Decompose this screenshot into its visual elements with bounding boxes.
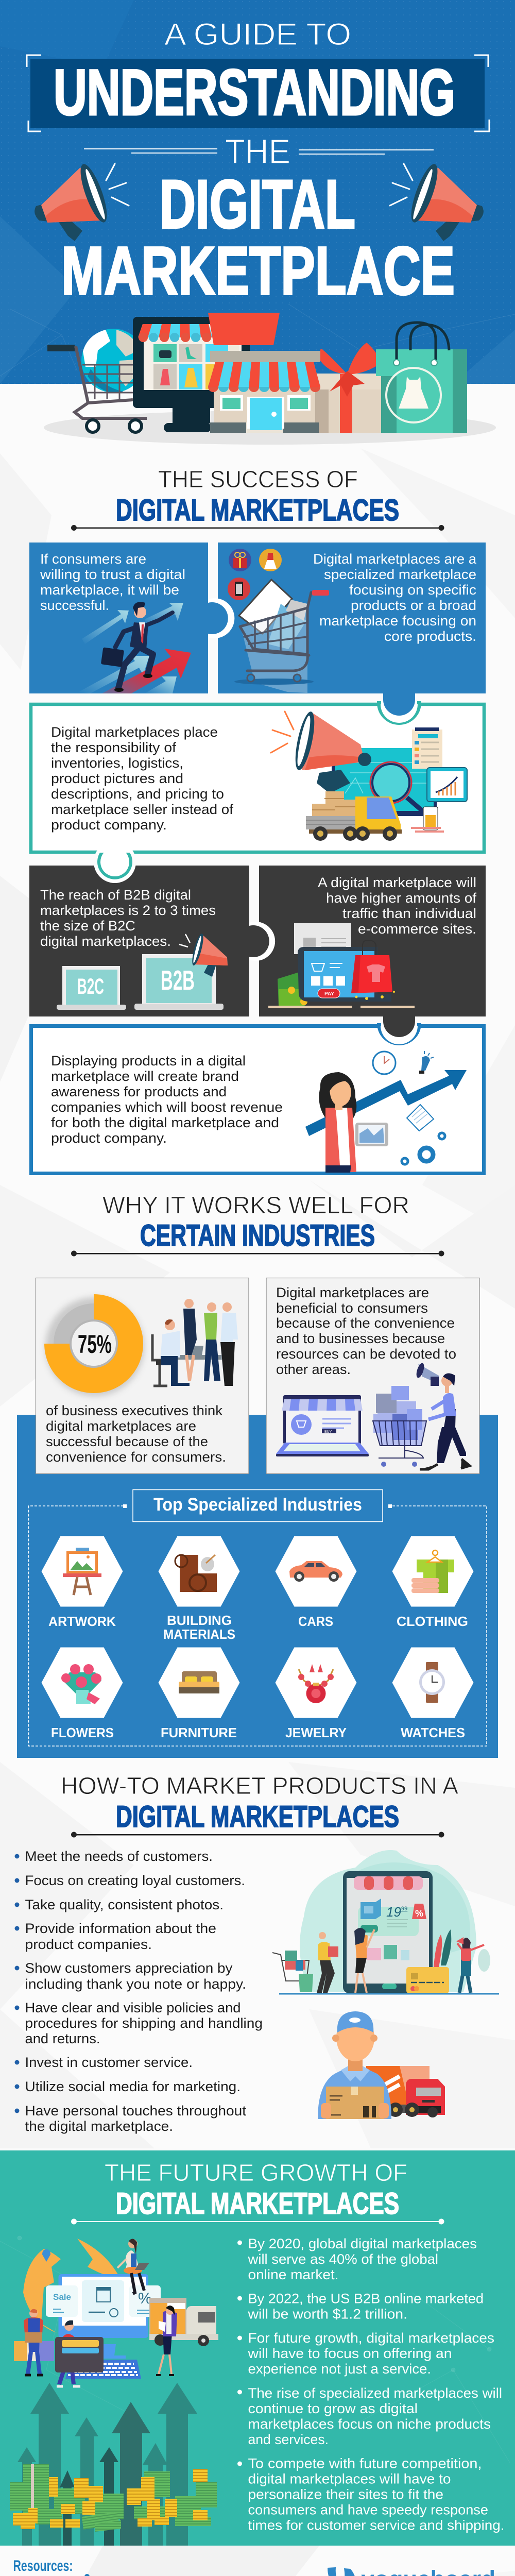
panel text: and to businesses because <box>276 1331 445 1346</box>
rule <box>0 2574 90 2576</box>
icon: B2C laptop: B2C <box>77 974 104 999</box>
panel text: marketplace, it will be <box>40 582 179 598</box>
tile: watches <box>392 1648 474 1740</box>
panel text: the size of B2C <box>40 918 135 934</box>
hero background <box>0 0 515 384</box>
bullet list: future growth: times for customer service and shipping. <box>248 2517 505 2533</box>
shopping cart <box>47 345 147 432</box>
bullet list: future growth: continue to grow as digital <box>248 2401 418 2416</box>
section heading: success <box>71 466 444 531</box>
bullet list: how-to: Provide information about the <box>25 1921 216 1936</box>
heading bold line: DIGITAL MARKETPLACES <box>116 494 399 527</box>
icon: B2B laptop: B2B <box>161 965 195 996</box>
label <box>163 1613 235 1642</box>
label: MATERIALS <box>163 1626 235 1642</box>
title box <box>30 59 485 128</box>
bullet list: future growth: By 2020, global digital marketplaces <box>248 2236 477 2251</box>
section heading: how-to <box>61 1772 458 1837</box>
icon: right megaphone <box>390 161 484 241</box>
icon: online shop laptop: PAY <box>324 991 334 997</box>
panel text: marketplaces is 2 to 3 times <box>40 903 216 918</box>
panel text: If consumers are <box>40 551 146 567</box>
panel text: awareness for products and <box>51 1084 227 1099</box>
icon: delivery man with truck <box>318 2011 445 2119</box>
label: ARTWORK <box>48 1614 116 1629</box>
panel text: marketplace seller instead of <box>51 802 234 817</box>
bullet list: how-to: including thank you note or happy. <box>25 1976 246 1992</box>
panel text: resources can be devoted to <box>276 1346 456 1362</box>
panel text: marketplace will create brand <box>51 1069 239 1084</box>
bullet list: future growth: To compete with future competition, <box>248 2455 482 2471</box>
tile: jewelry <box>275 1648 356 1740</box>
bullet list: how-to: Have personal touches throughout <box>25 2103 247 2119</box>
bullet list: how-to: Have clear and visible policies and <box>25 2000 241 2015</box>
label: WATCHES <box>401 1725 465 1740</box>
heading bold line: CERTAIN INDUSTRIES <box>140 1219 375 1252</box>
icon: left megaphone <box>35 161 129 241</box>
panel text: of business executives think <box>46 1403 223 1418</box>
panel text <box>318 875 477 937</box>
panel text: The reach of B2B digital <box>40 887 191 903</box>
panel text: product company. <box>51 1130 167 1146</box>
icon: megaphone <box>179 933 228 977</box>
icon: gift badge <box>229 549 251 571</box>
label: JEWELRY <box>285 1725 347 1740</box>
bullet list: how-to: Utilize social media for marketing. <box>25 2079 241 2094</box>
shopping bag <box>376 323 467 433</box>
label: FLOWERS <box>51 1725 114 1740</box>
panel text: companies which will boost revenue <box>51 1099 283 1115</box>
panel: specialized <box>208 543 486 693</box>
tile: artwork <box>41 1536 123 1629</box>
illustration: e-commerce team: % <box>138 2290 152 2307</box>
icon: B2C laptop <box>57 966 126 1010</box>
panel text: e-commerce sites. <box>358 921 476 937</box>
label: FURNITURE <box>161 1725 237 1740</box>
icon: woman with growth arrow <box>305 1051 467 1173</box>
tile: building materials <box>159 1536 240 1642</box>
panel text: marketplace focusing on <box>319 613 476 629</box>
icon: B2B laptop <box>134 954 224 1010</box>
panel text <box>40 551 185 613</box>
divider <box>71 1832 444 1837</box>
label: CARS <box>298 1614 333 1629</box>
panel text: other areas. <box>276 1362 351 1377</box>
bullet list: how-to: Focus on creating loyal customers. <box>25 1873 245 1888</box>
icon: online shop laptop <box>268 923 415 1008</box>
heading bold line: DIGITAL MARKETPLACES <box>116 1800 399 1834</box>
title: DIGITAL: DIGITAL <box>160 166 355 243</box>
bullet list: how-to: product companies. <box>25 1937 152 1952</box>
double rules <box>84 149 434 154</box>
panel text: inventories, logistics, <box>51 755 183 771</box>
panel text: successful. <box>40 598 109 613</box>
icon: team at desk <box>152 1299 238 1386</box>
panel text: successful because of the <box>46 1434 208 1449</box>
footer: resources <box>0 2557 300 2576</box>
heading light line: WHY IT WORKS WELL FOR <box>102 1192 409 1218</box>
panel: convenience <box>266 1278 479 1473</box>
title box <box>133 1490 383 1522</box>
panel text: Digital marketplaces are a <box>313 551 477 567</box>
tile: cars <box>275 1536 356 1629</box>
bullet list: future growth: digital marketplaces will have to <box>248 2471 451 2486</box>
panel text <box>51 724 234 833</box>
panel text: Digital marketplaces place <box>51 724 218 740</box>
bullet list: future growth: will have to focus on offering an <box>247 2346 452 2361</box>
monitor <box>133 317 250 432</box>
globe <box>81 329 145 393</box>
panel text: willing to trust a digital <box>40 567 185 582</box>
puzzle knob <box>249 866 275 1016</box>
bullet list: how-to <box>14 1849 263 2134</box>
bullet list: future growth: For future growth, digital marketplaces <box>248 2330 494 2346</box>
title text: Top Specialized Industries <box>153 1495 362 1515</box>
donut chart: 75% <box>78 1330 112 1359</box>
icon: mobile store illustration: % <box>415 1908 423 1919</box>
ground shadow <box>44 411 496 445</box>
icon: woman with cart and megaphone <box>373 1362 470 1469</box>
heading bold line: DIGITAL MARKETPLACES <box>116 2187 399 2221</box>
panel text: product company. <box>51 817 167 833</box>
corner brackets <box>27 55 489 131</box>
tile: furniture <box>159 1648 240 1740</box>
bullet list: future growth: will serve as 40% of the global <box>247 2251 438 2267</box>
panel text: focusing on specific <box>349 582 476 598</box>
bullet list: how-to: Invest in customer service. <box>25 2055 193 2070</box>
illustration: e-commerce team: Sale <box>53 2292 71 2302</box>
panel text: beneficial to consumers <box>276 1300 428 1316</box>
panel text: digital marketplaces. <box>40 934 171 949</box>
panel: future growth <box>0 2150 515 2546</box>
panel text: because of the convenience <box>276 1315 455 1331</box>
bullet list: future growth: marketplaces focus on niche products <box>248 2416 491 2432</box>
panel text: products or a broad <box>351 598 476 613</box>
panel text: Digital marketplaces are <box>276 1285 429 1300</box>
bullet list: how-to: Show customers appreciation by <box>25 1960 233 1976</box>
icon: mobile store illustration: 19 <box>386 1904 401 1920</box>
panel: top specialized industries <box>29 1490 487 1746</box>
donut chart <box>44 1294 144 1396</box>
puzzle knob <box>208 543 234 693</box>
icon: mobile store illustration: 99 <box>401 1906 407 1912</box>
logo mark <box>328 2567 356 2576</box>
bullet list: future growth: consumers and have speedy response <box>248 2502 488 2517</box>
icon: marketing illustration <box>271 710 467 841</box>
panel: B2B reach <box>29 841 249 1016</box>
bullet list: future growth: personalize their sites to fit the <box>248 2486 443 2502</box>
label: CLOTHING <box>397 1614 468 1629</box>
panel text: specialized marketplace <box>324 567 476 582</box>
blue industries section background <box>17 1415 498 1758</box>
bullet list: future growth: The rise of specialized marketplaces will <box>248 2385 502 2401</box>
resources heading: Resources: <box>13 2557 73 2574</box>
heading light line: HOW-TO MARKET PRODUCTS IN A <box>61 1772 458 1799</box>
gift box <box>315 343 386 433</box>
divider <box>71 1251 444 1256</box>
panel text: descriptions, and pricing to <box>51 786 224 802</box>
storefront <box>208 313 320 433</box>
heading light line: THE SUCCESS OF <box>158 466 358 493</box>
logo: vogueboard <box>313 2566 515 2576</box>
panel text <box>51 1053 283 1146</box>
icon: shop laptop: BUY <box>324 1430 332 1434</box>
icon: phone badge <box>228 578 250 600</box>
panel text: core products. <box>384 629 476 644</box>
panel: traffic <box>249 866 486 1016</box>
label: BUILDING <box>167 1613 232 1628</box>
heading light line: THE FUTURE GROWTH OF <box>105 2159 407 2186</box>
bullet list: future growth: experience not just a service. <box>248 2361 431 2377</box>
illustration: money pile <box>10 2464 217 2532</box>
panel: trust <box>29 543 208 693</box>
puzzle knob <box>93 841 139 883</box>
tile: flowers <box>41 1648 123 1740</box>
dashed frame <box>29 1506 487 1746</box>
panel text: traffic than individual <box>342 906 476 921</box>
chart: rising arrows <box>18 2383 197 2546</box>
bullet list: future growth <box>237 2236 505 2533</box>
panel text: digital marketplaces are <box>46 1418 196 1434</box>
icon: dress badge <box>259 549 282 571</box>
bullet list: how-to: Meet the needs of customers. <box>25 1849 213 1864</box>
panel text <box>313 551 477 644</box>
panel text: have higher amounts of <box>326 890 477 906</box>
hero illustration: online store <box>44 313 496 445</box>
puzzle knob <box>377 1016 421 1045</box>
panel text <box>40 887 216 949</box>
panel text <box>46 1403 226 1465</box>
icon: shopping cart with tablets <box>234 580 329 693</box>
icon: businessman on arrows <box>79 602 191 693</box>
icon: mobile store illustration <box>272 1850 499 1995</box>
panel text: the responsibility of <box>51 740 177 755</box>
tile: clothing <box>392 1536 474 1629</box>
bullet list: how-to: Take quality, consistent photos. <box>25 1897 224 1912</box>
divider <box>71 525 444 531</box>
bullet list: future growth: will be worth $1.2 trillion. <box>247 2306 407 2321</box>
panel text: Displaying products in a digital <box>51 1053 246 1069</box>
panel: brand awareness <box>31 1016 484 1174</box>
heading: A GUIDE TO: A GUIDE TO <box>164 17 351 52</box>
heading: THE: THE <box>225 132 290 171</box>
divider <box>71 2218 444 2225</box>
bullet list: future growth: and services. <box>248 2432 329 2447</box>
bullet list: future growth: By 2022, the US B2B online marketed <box>248 2291 484 2306</box>
panel: responsibility <box>31 693 484 852</box>
bullet list: how-to: the digital marketplace. <box>25 2119 173 2134</box>
panel text: A digital marketplace will <box>318 875 476 890</box>
panel text: product pictures and <box>51 771 183 786</box>
puzzle knob <box>377 693 421 725</box>
illustration: e-commerce team <box>14 2239 218 2386</box>
bullet list: how-to: procedures for shipping and handling <box>25 2015 263 2031</box>
section heading: why it works <box>71 1192 444 1256</box>
hero banner <box>0 0 515 384</box>
icon: shop laptop <box>276 1395 369 1456</box>
panel text <box>276 1285 456 1377</box>
panel text: for both the digital marketplace and <box>51 1115 279 1130</box>
bullet list: how-to: and returns. <box>25 2031 100 2046</box>
panel text: convenience for consumers. <box>46 1449 226 1465</box>
panel: 75 percent <box>36 1278 249 1473</box>
bullet list: future growth: online market. <box>248 2267 339 2282</box>
sub-figures <box>272 1928 499 1995</box>
